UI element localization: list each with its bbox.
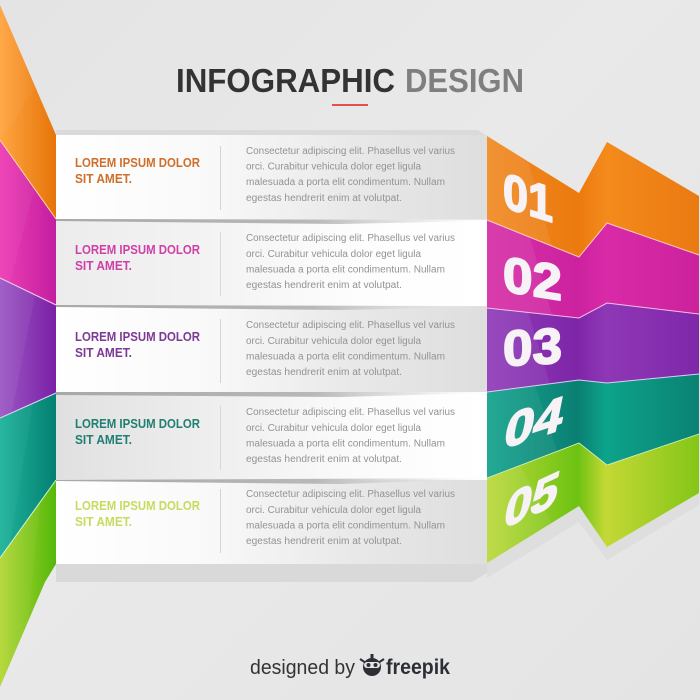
row 3 heading: LOREM IPSUM DOLOR: [75, 330, 200, 344]
left ribbons: [0, 5, 56, 687]
footer credit: designed by: [250, 657, 355, 679]
row 3 top shadow: [56, 305, 487, 310]
row 4 heading: LOREM IPSUM DOLOR: [75, 417, 200, 431]
row 3 body text: [246, 320, 455, 378]
row 3 divider: [220, 319, 221, 383]
row 4 body text: orci. Curabitur vehicula dolor eget ligula: [246, 423, 421, 434]
row 2 body text: [246, 233, 455, 291]
row 1 body text: orci. Curabitur vehicula dolor eget ligula: [246, 162, 421, 172]
row 5 body text: egestas hendrerit enim at volutpat.: [246, 536, 402, 547]
row 3 body text: Consectetur adipiscing elit. Phasellus vel varius: [246, 320, 455, 331]
row 3 body text: orci. Curabitur vehicula dolor eget ligula: [246, 336, 421, 347]
number 03: 03: [503, 318, 562, 377]
row 4 body text: Consectetur adipiscing elit. Phasellus vel varius: [246, 407, 455, 418]
row 4 body text: egestas hendrerit enim at volutpat.: [246, 454, 402, 465]
row 1 body text: [246, 146, 455, 204]
row 5 body text: orci. Curabitur vehicula dolor eget ligula: [246, 505, 421, 516]
row 1 body text: egestas hendrerit enim at volutpat.: [246, 193, 402, 204]
row 1 heading: [75, 156, 200, 186]
number 02: 02: [503, 245, 562, 311]
row 5 body text: [246, 489, 455, 547]
panel: row 3: [56, 305, 487, 392]
left ribbon: purple: [0, 278, 56, 418]
title: INFOGRAPHIC: [176, 62, 395, 99]
title: DESIGN: [405, 62, 524, 99]
panel: row 4: [56, 392, 487, 480]
row 2 heading: [75, 243, 200, 273]
number 05: 05: [500, 460, 564, 540]
icon: freepik mascot: [360, 654, 384, 676]
row 5 divider: [220, 489, 221, 553]
row 2 divider: [220, 232, 221, 296]
left ribbon: teal: [0, 393, 56, 558]
row 5 body text: malesuada a porta elit condimentum. Nullam: [246, 520, 445, 532]
row 4 body text: [246, 407, 455, 465]
row 2 body text: malesuada a porta elit condimentum. Nullam: [246, 264, 445, 276]
row 4 heading: [75, 417, 200, 447]
row 2 top shadow: [56, 219, 487, 224]
row 3 heading: [75, 330, 200, 360]
panel: row 5: [56, 478, 487, 564]
row 5 heading: [75, 499, 200, 529]
row 2 body text: Consectetur adipiscing elit. Phasellus vel varius: [246, 233, 455, 244]
row 2 body text: orci. Curabitur vehicula dolor eget ligula: [246, 249, 421, 260]
row 4 heading: SIT AMET.: [75, 433, 132, 447]
row 1 heading: SIT AMET.: [75, 172, 132, 186]
left ribbon: orange: [0, 5, 56, 219]
panel shadow bottom: [56, 564, 487, 582]
row 3 heading: SIT AMET.: [75, 346, 132, 360]
row 1 heading: LOREM IPSUM DOLOR: [75, 156, 200, 170]
row 5 body text: Consectetur adipiscing elit. Phasellus vel varius: [246, 489, 455, 500]
row 1 body text: malesuada a porta elit condimentum. Nullam: [246, 177, 445, 188]
row 1 body text: Consectetur adipiscing elit. Phasellus vel varius: [246, 146, 455, 157]
number 04: 04: [500, 384, 569, 460]
row 2 heading: LOREM IPSUM DOLOR: [75, 243, 200, 257]
row 4 body text: malesuada a porta elit condimentum. Nullam: [246, 438, 445, 450]
right ribbon: teal 04: [487, 374, 699, 478]
row 2 heading: SIT AMET.: [75, 259, 132, 273]
panel: row 2: [56, 219, 487, 306]
ribbon shadow bottom right: [487, 493, 699, 578]
row 3 body text: egestas hendrerit enim at volutpat.: [246, 367, 402, 378]
panel shadow top: [56, 130, 487, 136]
number 01: 01: [503, 162, 553, 233]
left ribbon: magenta: [0, 140, 56, 305]
title: [176, 62, 524, 99]
row 5 top shadow: [56, 478, 487, 484]
row 1 divider: [220, 146, 221, 210]
right ribbons: [487, 136, 699, 563]
footer credit: freepik: [386, 656, 450, 679]
title accent line: [332, 104, 368, 106]
right ribbon: magenta 02: [487, 220, 699, 318]
row 2 body text: egestas hendrerit enim at volutpat.: [246, 280, 402, 291]
panel: row 1: [56, 135, 487, 219]
row 4 top shadow: [56, 392, 487, 397]
row 3 body text: malesuada a porta elit condimentum. Nullam: [246, 352, 445, 362]
row 5 heading: LOREM IPSUM DOLOR: [75, 499, 200, 513]
right ribbon: purple 03: [487, 303, 699, 392]
footer credit: [250, 654, 450, 679]
left ribbon: green: [0, 480, 56, 687]
row 5 heading: SIT AMET.: [75, 515, 132, 529]
right ribbon: green 05: [487, 434, 699, 563]
row 4 divider: [220, 406, 221, 470]
right ribbon: orange 01: [487, 136, 699, 257]
